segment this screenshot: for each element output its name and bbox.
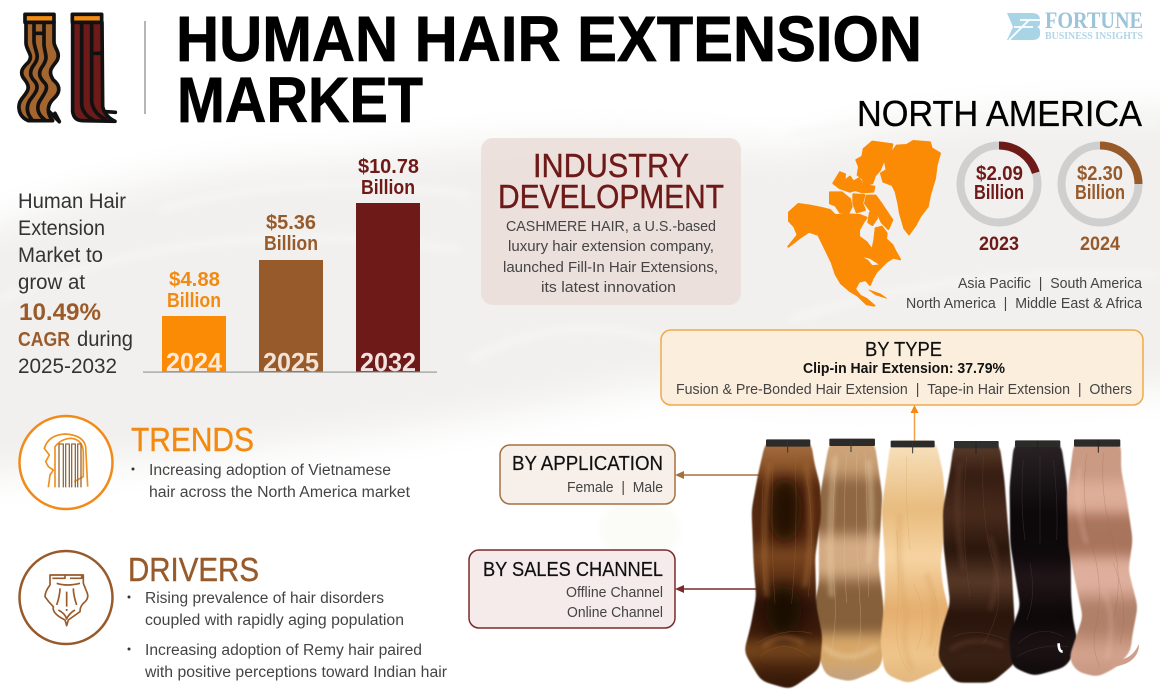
- bar: 2024: [162, 269, 226, 377]
- text block: regions: North America | Middle East & Africa: [906, 295, 1143, 312]
- text block: CAGR statement: [18, 189, 133, 378]
- hair: rose: [1068, 439, 1139, 676]
- text block: trends: [132, 462, 411, 501]
- icon: drivers circle: [20, 551, 112, 644]
- hair: blonde: [881, 441, 953, 683]
- bar: 2025: $5.36: [266, 212, 316, 234]
- icon: hair extensions logo: [19, 14, 115, 122]
- text block: drivers: Rising prevalence of hair disorders: [145, 590, 384, 607]
- text block: trends: Increasing adoption of Vietnamese: [149, 462, 391, 479]
- image: hair extensions row: [745, 439, 1139, 688]
- text block: drivers: with positive perceptions toward Indian hair: [144, 664, 447, 681]
- heading: drivers: DRIVERS: [128, 551, 259, 588]
- bar: 2032: Billion: [361, 177, 415, 199]
- panel: by application: [500, 445, 675, 504]
- text block: CAGR statement: CAGR: [18, 329, 70, 351]
- text block: CAGR statement: during: [77, 327, 133, 351]
- text block: regions: [906, 275, 1143, 312]
- text block: industry news: its latest innovation: [541, 279, 676, 296]
- donut: 2023 value: 2023: [979, 234, 1019, 255]
- donut: 2024 value: [1062, 146, 1138, 255]
- bar chart: market size: [143, 156, 437, 377]
- panel: by type: [661, 330, 1143, 405]
- donut: 2023 value: Billion: [974, 182, 1024, 204]
- bar: 2024: 2024: [166, 349, 223, 377]
- icon: straight maroon extension: [72, 14, 115, 121]
- bar: 2025: [259, 212, 323, 377]
- panel: industry development: [481, 138, 741, 305]
- logo: Fortune Business Insights: BUSINESS INSIGHTS: [1045, 31, 1143, 42]
- panel: by sales channel: Offline Channel: [566, 584, 663, 601]
- text block: drivers: Increasing adoption of Remy hair paired: [145, 642, 422, 659]
- text block: CAGR statement: Market to: [18, 243, 103, 267]
- icon: trends circle: [20, 416, 112, 509]
- title: [176, 3, 922, 136]
- text block: CAGR statement: Human Hair: [18, 189, 126, 213]
- donut: 2023 value: [960, 146, 1038, 255]
- arrow: to by sales channel: [675, 585, 758, 593]
- donut: 2023 value: $2.09: [976, 163, 1023, 185]
- text block: industry news: luxury hair extension company,: [508, 238, 714, 255]
- bar: 2032: $10.78: [358, 156, 419, 178]
- panel: by application: Female | Male: [567, 479, 663, 496]
- bar: 2024: $4.88: [169, 269, 220, 291]
- bar: 2025: Billion: [264, 233, 318, 255]
- text block: industry news: CASHMERE HAIR, a U.S.-based: [506, 218, 716, 235]
- donut: 2024 value: $2.30: [1077, 163, 1123, 185]
- text block: CAGR statement: grow at: [18, 270, 85, 294]
- arrow: to by application: [675, 471, 764, 479]
- heading: trends: TRENDS: [131, 421, 254, 458]
- panel: by type: BY TYPE: [865, 339, 942, 361]
- panel: by type: Clip-in Hair Extension: 37.79%: [803, 361, 1005, 377]
- heading: industry development: DEVELOPMENT: [498, 178, 724, 215]
- donut: 2024 value: Billion: [1075, 182, 1125, 204]
- panel: by sales channel: [469, 550, 675, 628]
- donut: 2024 value: 2024: [1080, 234, 1120, 255]
- title: MARKET: [177, 64, 423, 136]
- divider line: [144, 21, 146, 114]
- text block: CAGR statement: 10.49%: [19, 299, 101, 326]
- map: north america: [788, 141, 940, 306]
- text block: trends: hair across the North America market: [149, 484, 411, 501]
- icon: wavy brown extension: [19, 14, 59, 122]
- hair: dark chestnut: [745, 439, 821, 688]
- hair: caramel: [814, 439, 885, 681]
- text block: drivers: [128, 590, 447, 681]
- text block: industry news: [503, 218, 718, 296]
- bar: 2032: [356, 156, 420, 377]
- heading: north america: NORTH AMERICA: [857, 93, 1142, 134]
- text block: drivers: coupled with rapidly aging population: [145, 612, 404, 629]
- hair: black: [1010, 440, 1077, 675]
- panel: by sales channel: BY SALES CHANNEL: [483, 559, 663, 581]
- panel: by type: Fusion & Pre-Bonded Hair Extension | Tape-in Hair Extension | Others: [676, 381, 1132, 398]
- bar: 2024: Billion: [167, 290, 221, 312]
- heading: industry development: INDUSTRY: [533, 147, 689, 184]
- hair: dark brown: [939, 441, 1015, 682]
- panel: by sales channel: Online Channel: [567, 604, 663, 621]
- heading: industry development: [498, 147, 724, 215]
- text block: CAGR statement: Extension: [18, 216, 105, 240]
- bar: 2025: 2025: [263, 349, 319, 377]
- arrow: to by type: [910, 405, 918, 442]
- title: HUMAN HAIR EXTENSION: [176, 3, 922, 75]
- logo: Fortune Business Insights: [1007, 8, 1143, 42]
- bar: 2032: 2032: [360, 349, 416, 377]
- logo: Fortune Business Insights: FORTUNE: [1045, 8, 1143, 33]
- panel: by application: BY APPLICATION: [512, 453, 663, 475]
- text block: CAGR statement: 2025-2032: [18, 354, 117, 378]
- text block: industry news: launched Fill-In Hair Extensions,: [503, 259, 718, 276]
- text block: regions: Asia Pacific | South America: [958, 275, 1143, 292]
